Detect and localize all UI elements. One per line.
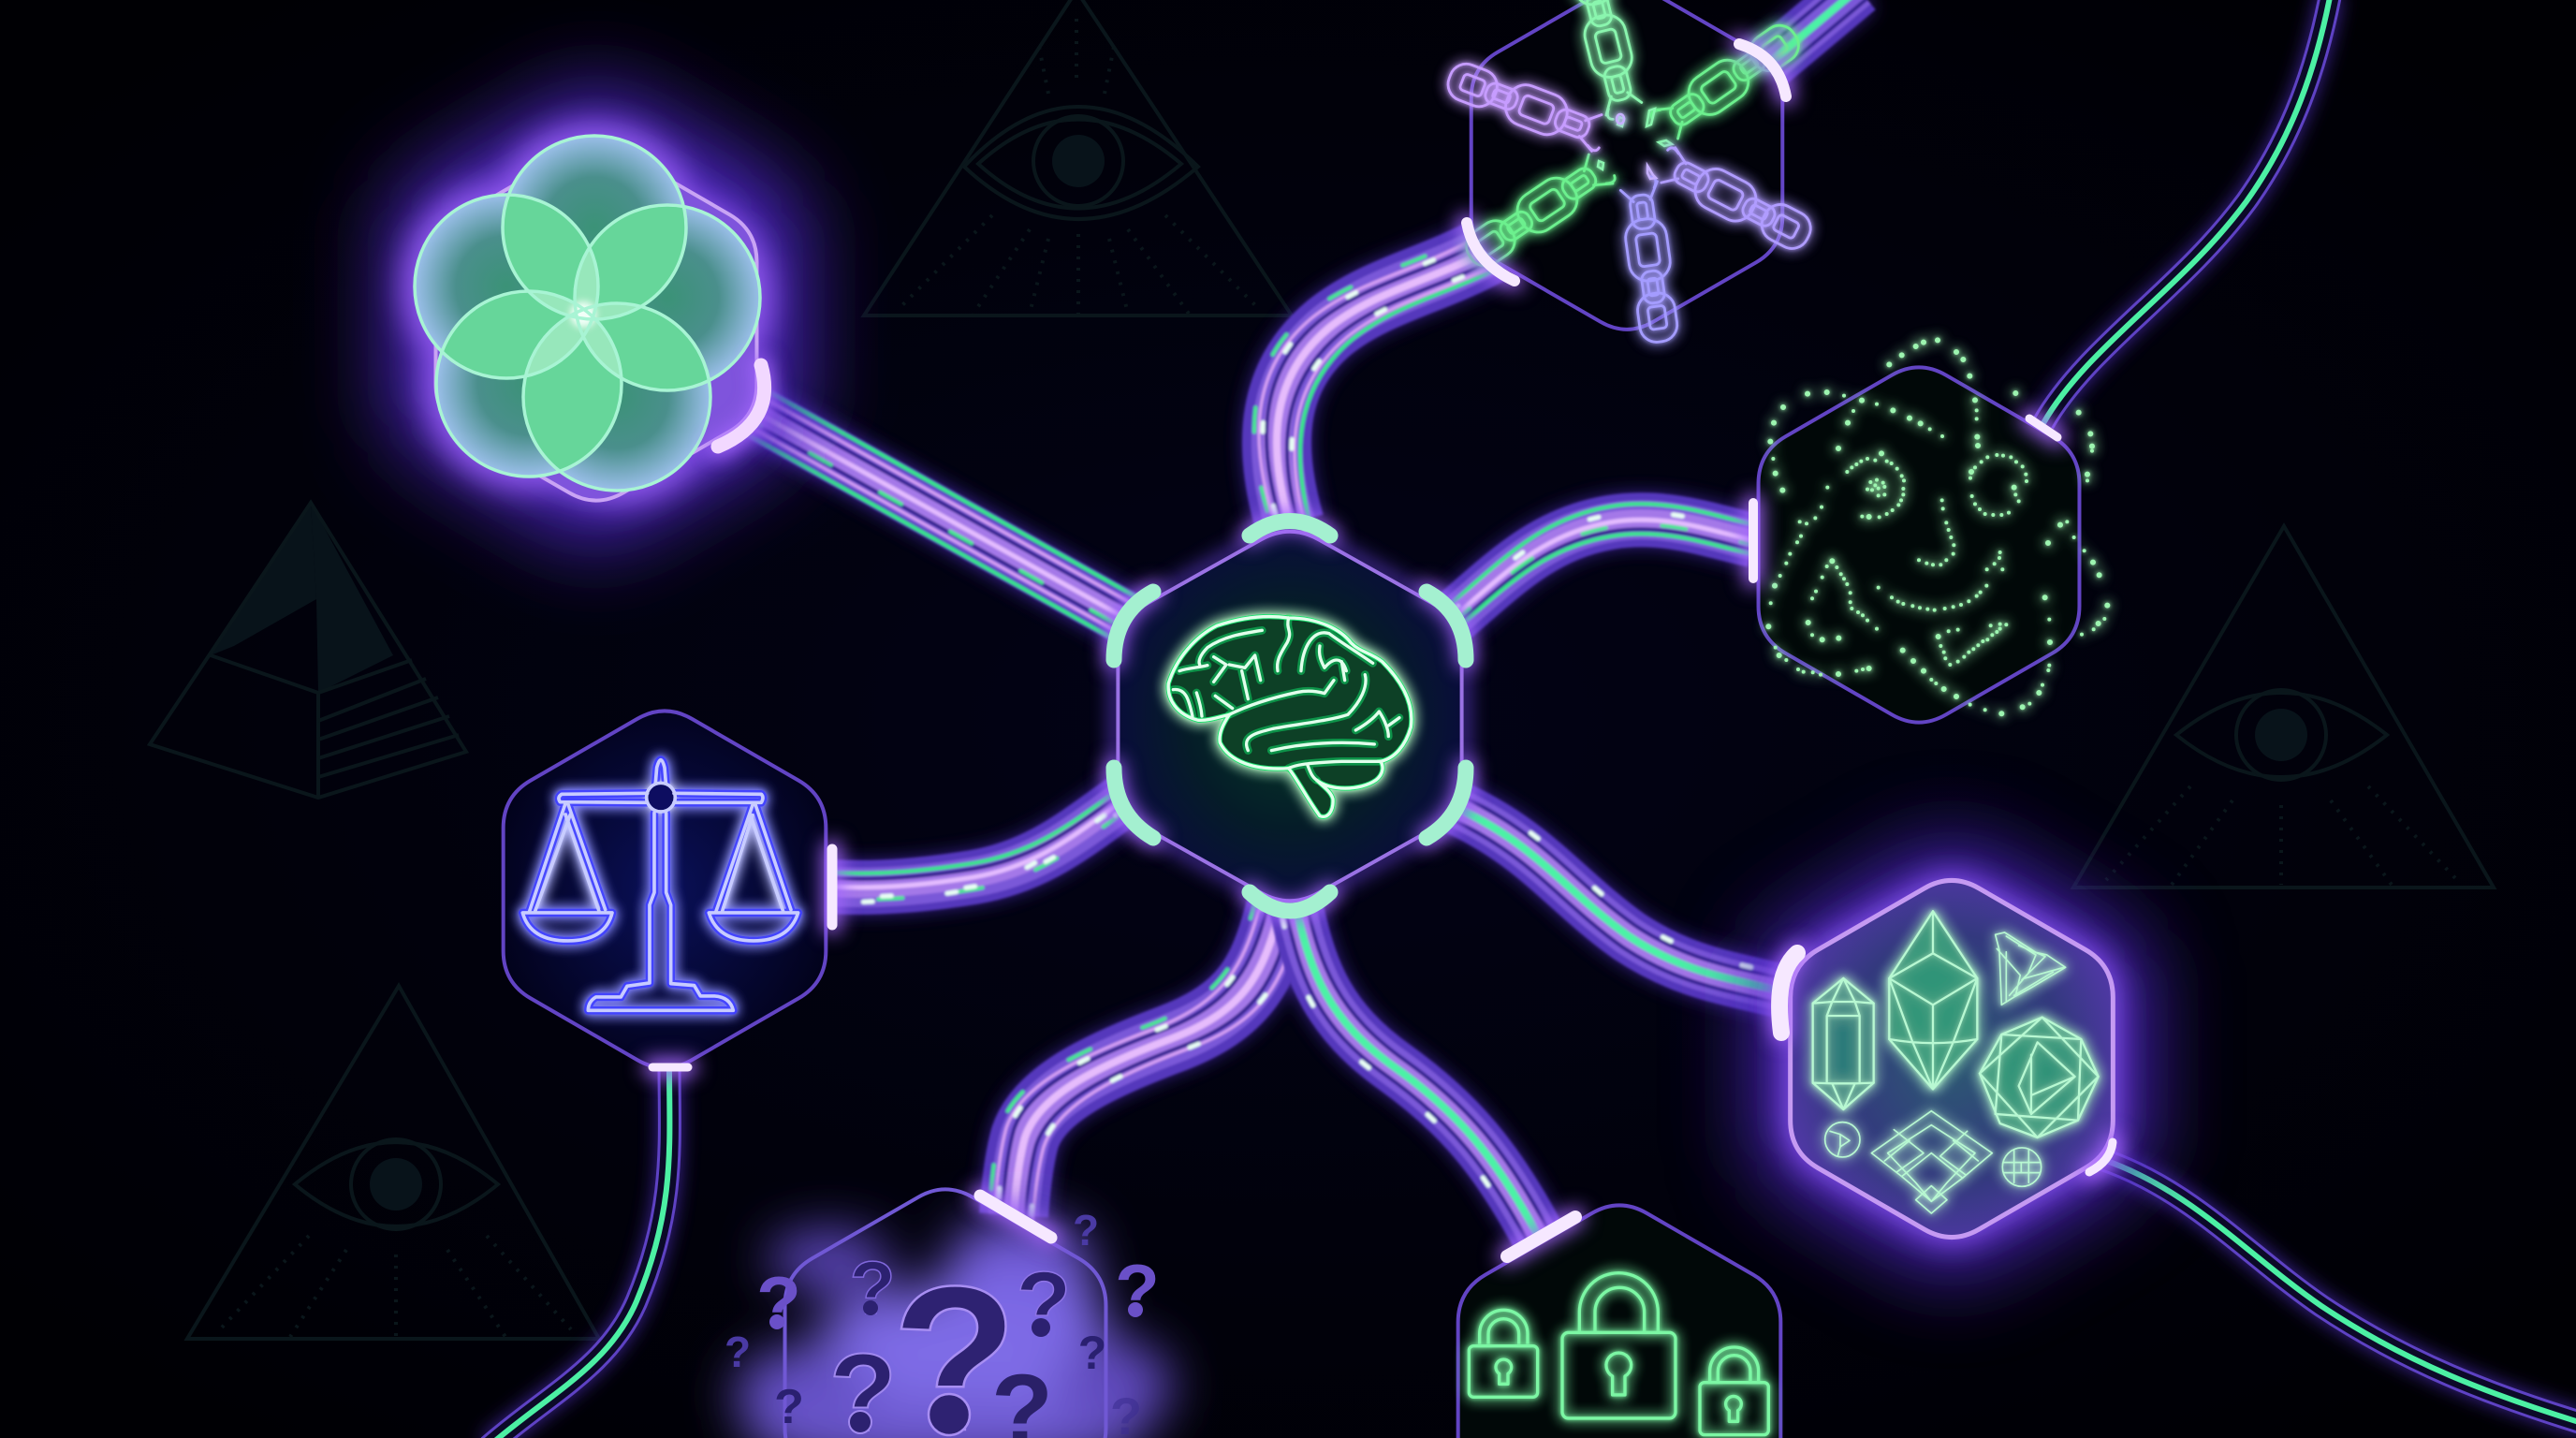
- panel: dotted face node: [1759, 340, 2107, 723]
- question marks: ?: [724, 1328, 751, 1376]
- panel: crystals and gems node: [1757, 844, 2146, 1274]
- panel: central brain hub: [1117, 530, 1463, 902]
- cable: brain to locks: [1282, 901, 1546, 1243]
- question marks: ?: [1115, 1249, 1160, 1331]
- icon: dot-matrix face: [1768, 340, 2107, 713]
- icon: purple chain arms: [1442, 57, 1817, 345]
- watermark: eye triangle right: [2073, 526, 2494, 888]
- question marks: ?: [850, 1246, 895, 1329]
- connector rings glow: [652, 44, 2113, 1256]
- watermark: eye triangle bottom left: [187, 986, 599, 1339]
- icon: balance scales: [522, 760, 798, 1010]
- watermark: eye triangle top: [864, 0, 1292, 315]
- question marks: [724, 1206, 1160, 1438]
- question marks: ?: [756, 1261, 801, 1343]
- icon: overlapping circles flower: [415, 136, 760, 491]
- panel: question-mark cloud node: [724, 1189, 1172, 1438]
- cable: face to top edge: [2043, 0, 2331, 423]
- cable: flower to brain: [732, 385, 1142, 641]
- small circle with grid: [2002, 1148, 2042, 1186]
- icon: neon brain: [1168, 617, 1412, 816]
- icon: crystal set: [1813, 911, 2099, 1213]
- question marks: ?: [774, 1380, 804, 1434]
- connectors: central hub: [1114, 521, 1466, 911]
- cable: brain to question cloud: [990, 895, 1299, 1225]
- icon: three padlocks: [1469, 1273, 1768, 1435]
- padlock: left: [1469, 1310, 1538, 1397]
- padlock: right: [1700, 1347, 1768, 1435]
- triangular knot: [1996, 932, 2066, 1005]
- large gem: [1889, 911, 1977, 1089]
- watermark: pyramid left: [150, 503, 466, 798]
- cable: brain to face: [1451, 504, 1753, 634]
- connectors: outer nodes: [652, 44, 2113, 1256]
- panel: padlocks node: [1458, 1205, 1780, 1438]
- flower glow: [389, 88, 803, 545]
- cable: chains to top edge: [1751, 0, 1866, 81]
- cable: brain to gems: [1445, 790, 1793, 1004]
- cable: brain to scales: [812, 786, 1123, 902]
- cloud: [735, 1214, 1172, 1438]
- hexagonal crystal: [1813, 978, 1874, 1109]
- panel: flower node: [389, 88, 803, 545]
- question marks: ?: [1017, 1254, 1071, 1354]
- octagonal gem: [1980, 1018, 2099, 1137]
- question marks: ?: [1078, 1327, 1106, 1379]
- panel: broken chains node: [1442, 0, 1817, 345]
- small circle with triangle: [1825, 1123, 1860, 1157]
- panel: scales of justice node: [504, 711, 826, 1068]
- cable: gems to right edge: [2101, 1159, 2576, 1425]
- icon: green chain arms: [1459, 0, 1807, 274]
- cable: scales to bottom edge: [489, 1067, 669, 1438]
- cable: brain to chains: [1254, 236, 1514, 536]
- padlock: large: [1562, 1273, 1676, 1418]
- diamond lattice: [1871, 1111, 1992, 1213]
- question marks: ?: [1073, 1206, 1099, 1255]
